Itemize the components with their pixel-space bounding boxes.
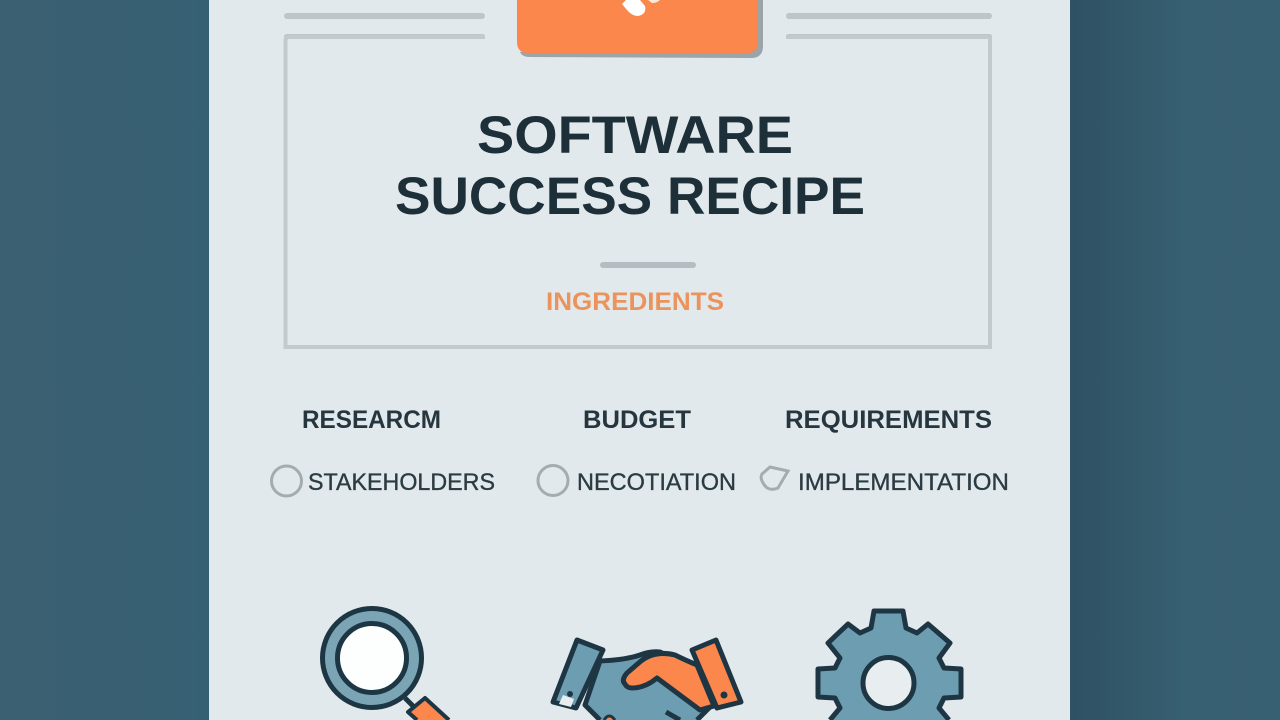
checklist items: STAKEHOLDERS — [308, 469, 495, 496]
heading: ingredients: INGREDIENTS — [546, 288, 724, 316]
column headings: BUDGET — [583, 406, 691, 434]
header frame — [286, 37, 990, 347]
title — [395, 106, 865, 226]
icon: gear — [818, 611, 961, 720]
icon: handshake — [553, 640, 741, 720]
background right — [1070, 0, 1280, 720]
icon: magnifying glass — [322, 608, 449, 720]
column headings: RESEARCM — [302, 406, 441, 434]
column headings: REQUIREMENTS — [785, 406, 992, 434]
icon: orange badge — [517, 0, 763, 58]
checklist items: NECOTIATION — [577, 469, 736, 496]
panel: recipe card — [209, 0, 1070, 720]
checklist items: IMPLEMENTATION — [798, 469, 1009, 496]
column headings — [302, 406, 992, 434]
background left — [0, 0, 209, 720]
title: SOFTWARE — [477, 106, 793, 165]
title: SUCCESS RECIPE — [395, 167, 865, 226]
checklist items — [272, 466, 1009, 496]
